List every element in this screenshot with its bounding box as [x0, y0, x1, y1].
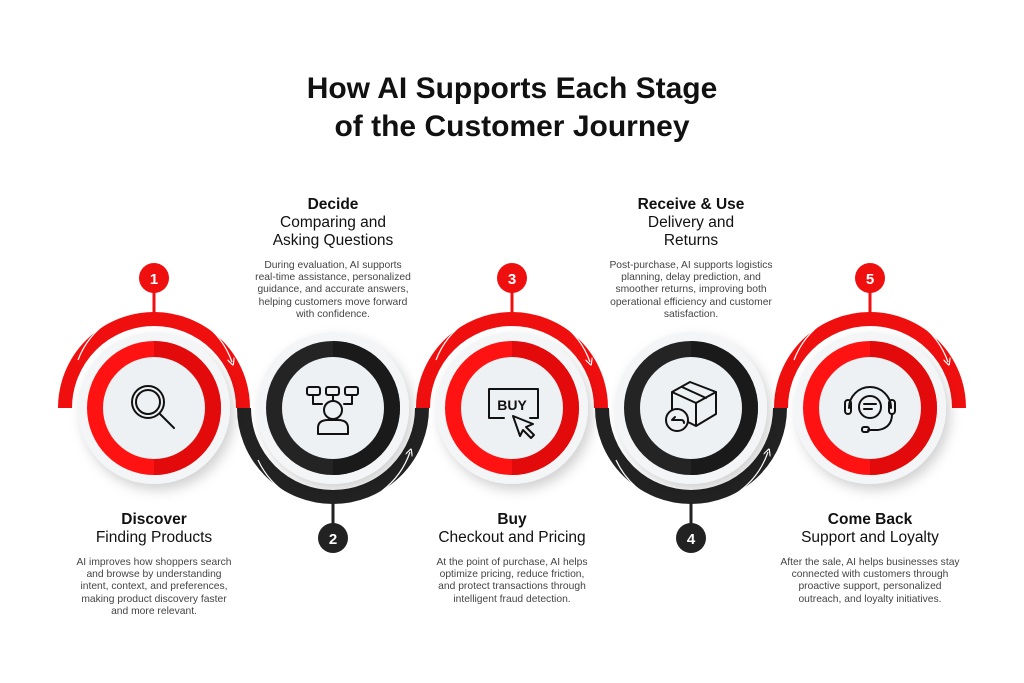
stage circle 1	[78, 332, 230, 484]
text: Receive & Use: Returns	[664, 232, 718, 249]
icon: buy button with cursor	[489, 389, 538, 438]
stage circle 5	[794, 332, 946, 484]
stage circle 4	[615, 332, 767, 484]
text: Come Back: After the sale, AI helps businesses stay	[780, 557, 960, 568]
text: Come Back: proactive support, personalized	[798, 581, 942, 592]
icon: magnifier	[132, 386, 174, 428]
text: Buy: At the point of purchase, AI helps	[436, 557, 588, 568]
icon: headset chat	[845, 387, 895, 432]
text: Receive & Use: operational efficiency and customer	[610, 297, 772, 308]
text: Decide: real-time assistance, personalized	[255, 272, 411, 283]
icon: box with return	[666, 382, 716, 431]
text: Receive & Use: smoother returns, improving both	[615, 284, 767, 295]
text: Receive & Use: satisfaction.	[664, 309, 718, 320]
text: Come Back: Support and Loyalty	[801, 529, 939, 546]
text: Buy	[436, 511, 588, 605]
title: How AI Supports Each Stage	[307, 72, 717, 105]
number badges: 4	[687, 531, 696, 548]
number badges: 5	[866, 271, 874, 288]
title: of the Customer Journey	[334, 110, 690, 143]
number badges	[139, 263, 885, 553]
number badges: 3	[508, 271, 516, 288]
text: Discover: Finding Products	[96, 529, 212, 546]
text: Discover: AI improves how shoppers search	[76, 557, 232, 568]
text: Decide: During evaluation, AI supports	[264, 260, 402, 271]
text: Discover: intent, context, and preferences,	[80, 581, 228, 592]
text: Buy: Buy	[497, 511, 527, 528]
text: Decide: Asking Questions	[273, 232, 394, 249]
text: Receive & Use	[609, 196, 773, 320]
text: Receive & Use: Post-purchase, AI supports logistics	[609, 260, 773, 271]
text: Discover: Discover	[121, 511, 187, 528]
text: Decide: helping customers move forward	[259, 297, 408, 308]
stage circle 2	[257, 332, 409, 484]
text: Buy: intelligent fraud detection.	[453, 594, 571, 605]
stage circle 3	[436, 332, 588, 484]
text: Come Back: Come Back	[828, 511, 913, 528]
text: Receive & Use: planning, delay prediction, and	[621, 272, 761, 283]
text: Decide: Comparing and	[280, 214, 386, 231]
icon: buy button with cursor: BUY	[497, 397, 527, 413]
text: Buy: and protect transactions through	[438, 581, 586, 592]
text: Come Back	[780, 511, 960, 605]
text: Buy: Checkout and Pricing	[438, 529, 586, 546]
icon: person with chat boxes	[307, 387, 358, 434]
text: Discover: and browse by understanding	[86, 569, 222, 580]
text: Discover	[76, 511, 232, 617]
title	[307, 72, 717, 143]
text: Discover: making product discovery faster	[81, 594, 227, 605]
text: Come Back: outreach, and loyalty initiatives.	[798, 594, 942, 605]
text: Decide: Decide	[308, 196, 359, 213]
text: Come Back: connected with customers through	[792, 569, 949, 580]
text: Decide	[255, 196, 411, 320]
text: Receive & Use: Delivery and	[648, 214, 734, 231]
text: Decide: guidance, and accurate answers,	[257, 284, 409, 295]
text: Decide: with confidence.	[295, 309, 370, 320]
text: Receive & Use: Receive & Use	[638, 196, 745, 213]
number badges: 1	[150, 271, 158, 288]
text: Buy: optimize pricing, reduce friction,	[440, 569, 584, 580]
number badges: 2	[329, 531, 337, 548]
arcs: path connecting stages	[65, 307, 959, 508]
text: Discover: and more relevant.	[111, 606, 197, 617]
